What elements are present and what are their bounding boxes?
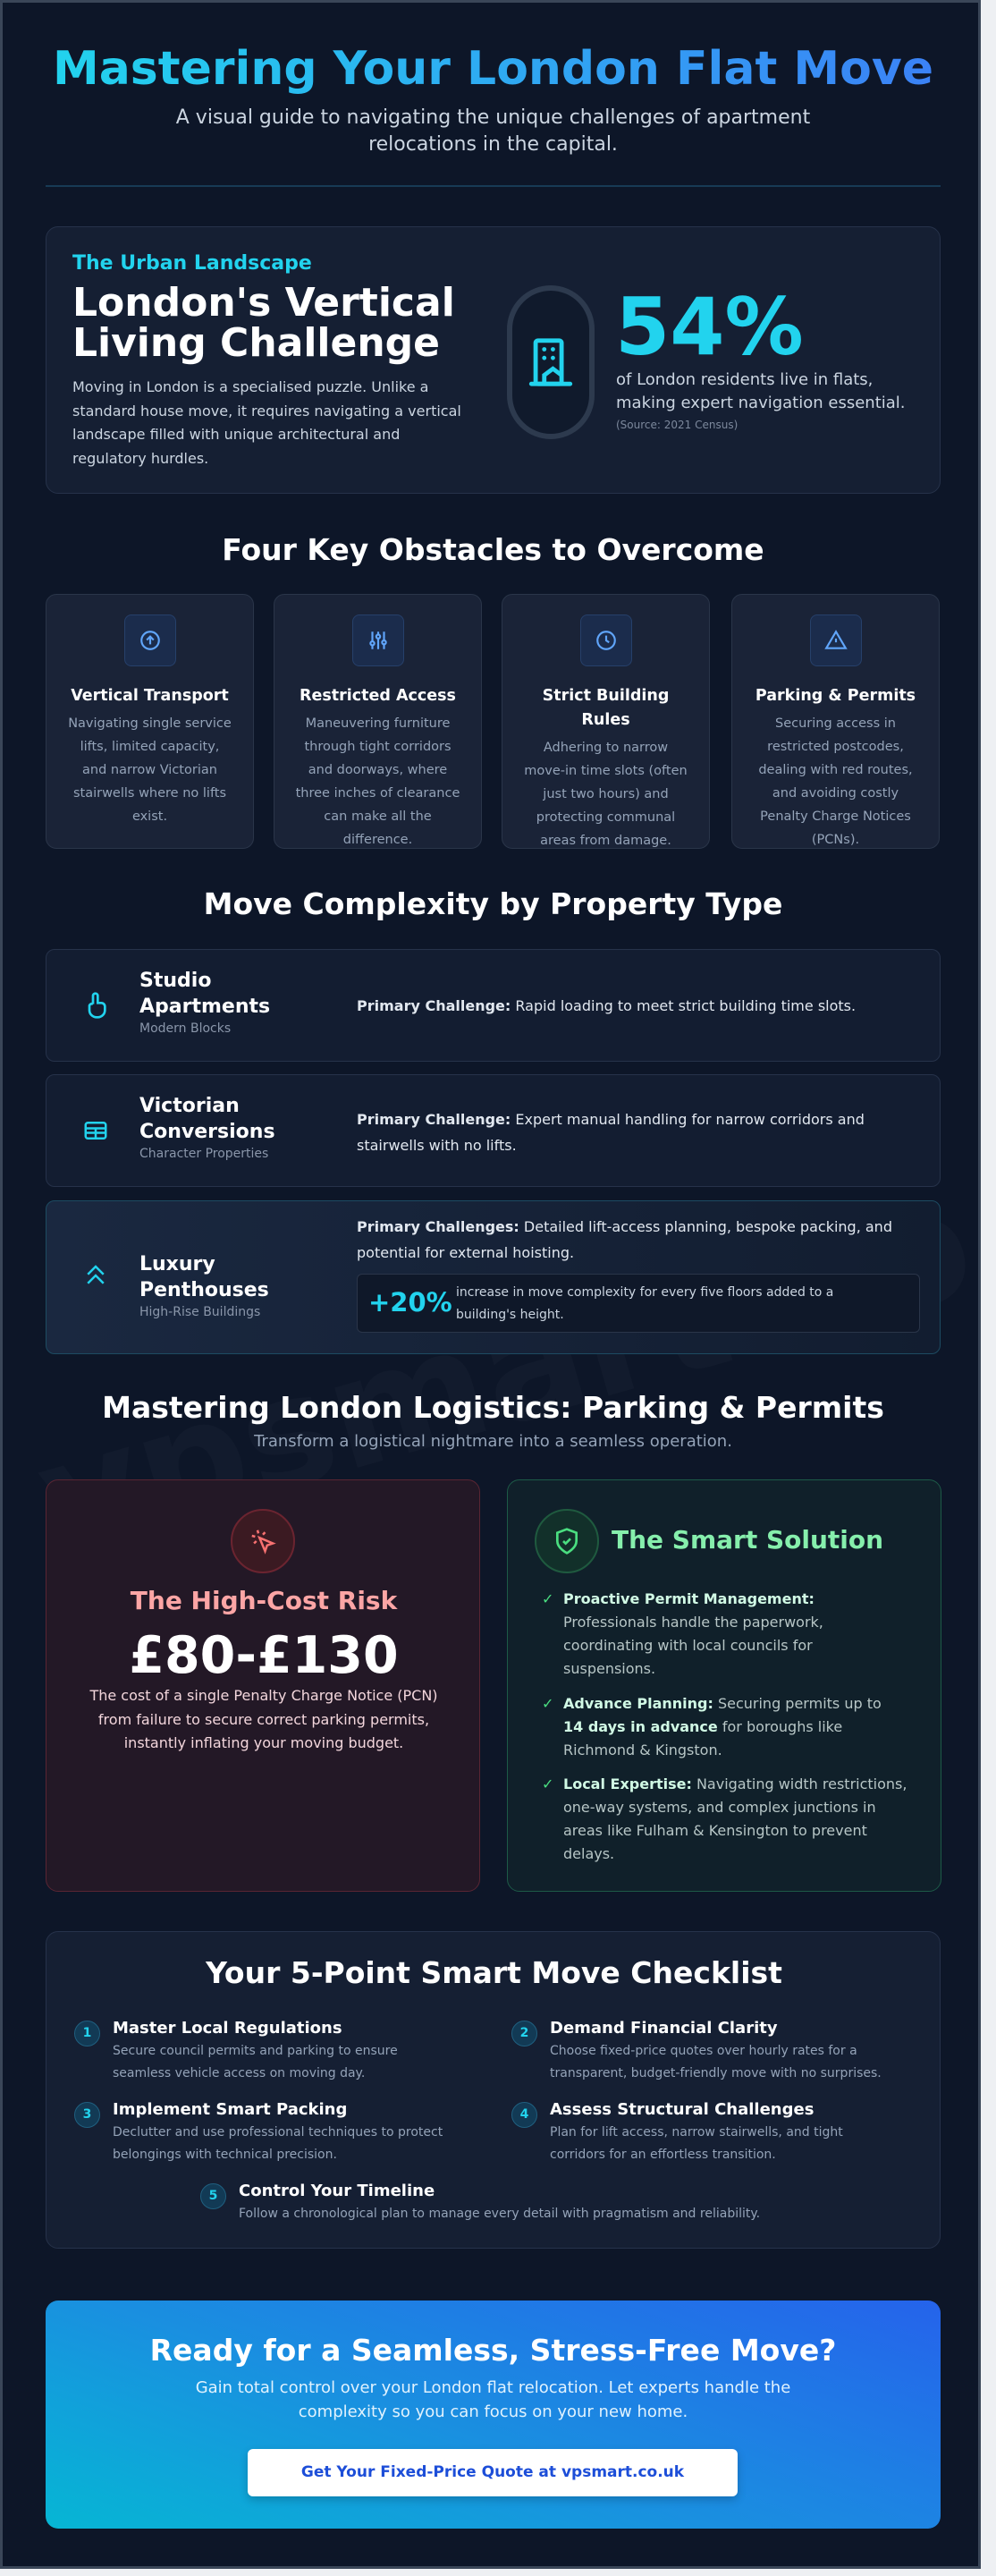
row: penthouse: Primary Challenges: Detailed lift-access planning, bespoke packing, and potential for external hoisting. <box>357 1218 892 1261</box>
card: strict building rules <box>502 594 710 849</box>
row: studio: Studio <box>139 970 211 992</box>
row: penthouse: Luxury <box>139 1253 215 1275</box>
item 4: Plan for lift access, narrow stairwells, and tight corridors for an effortless transition. <box>550 2125 843 2162</box>
item 2: Demand Financial Clarity <box>550 2019 778 2038</box>
card: strict building rules: Rules <box>581 711 630 729</box>
card: parking permits <box>731 594 940 849</box>
panel: checklist: Your 5-Point Smart Move Checklist <box>206 1955 782 1990</box>
stat 54%: 54% <box>615 281 804 373</box>
row: penthouse: High-Rise Buildings <box>139 1305 260 1319</box>
panel: smart solution: ✓ <box>542 1590 553 1607</box>
panel: checklist <box>46 1931 941 2249</box>
item 3: Implement Smart Packing <box>113 2100 347 2119</box>
item 5: Control Your Timeline <box>239 2182 435 2200</box>
panel: high-cost risk <box>46 1479 480 1892</box>
subheading: Transform a logistical nightmare into a seamless operation. <box>254 1432 732 1451</box>
card: restricted access: Restricted Access <box>300 687 456 705</box>
source: (Source: 2021 Census) <box>616 419 738 431</box>
icon: hand <box>88 992 106 1019</box>
item 2 <box>511 2019 882 2080</box>
CTA panel <box>46 2301 941 2529</box>
button <box>248 2449 738 2496</box>
item 3: 3 <box>83 2107 91 2122</box>
icon: table <box>84 1122 107 1140</box>
item 2: Choose fixed-price quotes over hourly rates for a transparent, budget-friendly move with no surprises. <box>550 2044 882 2080</box>
row: victorian: Conversions <box>139 1121 275 1143</box>
icon: building pill <box>507 285 595 439</box>
item 5: 5 <box>209 2189 217 2203</box>
panel: high-cost risk: The cost of a single Penalty Charge Notice (PCN) from failure to secure correct parking permits, instantly inflating your moving budget. <box>89 1687 438 1751</box>
stat caption: making expert navigation essential. <box>616 394 906 412</box>
icon: shield <box>535 1509 599 1573</box>
item: proactive: Proactive Permit Management: Professionals handle the paperwork, coordinating with local councils for suspensions. <box>563 1590 823 1677</box>
item 3: Declutter and use professional techniques to protect belongings with technical precision. <box>113 2125 443 2162</box>
stat box <box>357 1274 920 1333</box>
subtitle: A visual guide to navigating the unique challenges of apartment relocations in the capital. <box>176 106 810 156</box>
item 1 <box>74 2019 398 2080</box>
row: studio: Primary Challenge: Rapid loading to meet strict building time slots. <box>357 997 856 1014</box>
panel: smart solution <box>507 1479 941 1892</box>
panel: urban landscape <box>46 226 941 494</box>
panel: smart solution: ✓ <box>542 1695 553 1712</box>
item 5: Follow a chronological plan to manage every detail with pragmatism and reliability. <box>239 2207 760 2221</box>
item 2: 2 <box>520 2026 528 2040</box>
row: victorian: Victorian <box>139 1095 240 1117</box>
item 1: 1 <box>83 2026 91 2040</box>
row: penthouse <box>46 1200 941 1354</box>
item: local: Local Expertise: Navigating width restrictions, one-way systems, and complex junctions in areas like Fulham & Kensington to prevent delays. <box>563 1775 907 1862</box>
item 3 <box>74 2100 443 2162</box>
panel: smart solution: The Smart Solution <box>612 1525 883 1555</box>
card: vertical transport <box>46 594 254 849</box>
heading: logistics: Mastering London Logistics: Parking & Permits <box>102 1390 884 1425</box>
panel: smart solution: ✓ <box>542 1775 553 1792</box>
row: studio: Modern Blocks <box>139 1021 231 1036</box>
heading <box>72 280 455 366</box>
item 1: Secure council permits and parking to ensure seamless vehicle access on moving day. <box>113 2044 398 2080</box>
item 5 <box>200 2182 760 2221</box>
CTA panel: Ready for a Seamless, Stress-Free Move? <box>150 2333 836 2368</box>
row: victorian <box>46 1074 941 1187</box>
stat box: increase in move complexity for every five floors added to a building's height. <box>456 1285 833 1322</box>
stat box: +20% <box>368 1287 452 1318</box>
card: strict building rules: Strict Building <box>543 687 669 705</box>
item 4 <box>511 2100 843 2162</box>
body text: Moving in London is a specialised puzzle. Unlike a standard house move, it requires navigating a vertical landscape filled with unique architectural and regulatory hurdles. <box>72 378 461 467</box>
icon: click <box>231 1509 295 1573</box>
heading: move complexity: Move Complexity by Property Type <box>204 886 782 921</box>
title: Mastering Your London Flat Move <box>53 42 933 96</box>
heading: Living Challenge <box>72 320 440 366</box>
heading: four obstacles: Four Key Obstacles to Overcome <box>222 532 764 567</box>
row: penthouse: Penthouses <box>139 1279 269 1301</box>
item 4: 4 <box>520 2107 528 2122</box>
card: vertical transport: Vertical Transport <box>71 687 229 705</box>
stat caption: of London residents live in flats, <box>616 370 873 389</box>
button: Get Your Fixed-Price Quote at vpsmart.co.uk <box>301 2463 684 2481</box>
row: studio: Apartments <box>139 996 270 1018</box>
item 4: Assess Structural Challenges <box>550 2100 814 2119</box>
row: studio <box>46 949 941 1062</box>
card: restricted access: Maneuvering furniture through tight corridors and doorways, where three inches of clearance can make all the difference. <box>296 716 460 847</box>
card: parking permits: Parking & Permits <box>755 687 916 705</box>
row: victorian: Primary Challenge: Expert manual handling for narrow corridors and stairwells with no lifts. <box>357 1111 865 1154</box>
card: strict building rules: Adhering to narrow move-in time slots (often just two hours) and protecting communal areas from damage. <box>524 741 688 848</box>
card: parking permits: Securing access in restricted postcodes, dealing with red routes, and avoiding costly Penalty Charge Notices (PCNs). <box>758 716 913 847</box>
card: restricted access <box>274 594 482 849</box>
item 1: Master Local Regulations <box>113 2019 342 2038</box>
panel: high-cost risk: The High-Cost Risk <box>131 1586 397 1615</box>
stat caption <box>616 370 906 412</box>
heading: London's Vertical <box>72 280 455 326</box>
kicker: The Urban Landscape <box>72 252 312 275</box>
CTA panel: Gain total control over your London flat relocation. Let experts handle the complexity so you can focus on your new home. <box>196 2378 790 2421</box>
icon: chevrons up <box>87 1265 105 1284</box>
row: victorian: Character Properties <box>139 1147 268 1161</box>
panel: high-cost risk: £80-£130 <box>129 1626 399 1685</box>
item: planning: Advance Planning: Securing permits up to 14 days in advance for boroughs like Richmond & Kingston. <box>563 1695 882 1758</box>
card: vertical transport: Navigating single service lifts, limited capacity, and narrow Victorian stairwells where no lifts exist. <box>68 716 232 824</box>
